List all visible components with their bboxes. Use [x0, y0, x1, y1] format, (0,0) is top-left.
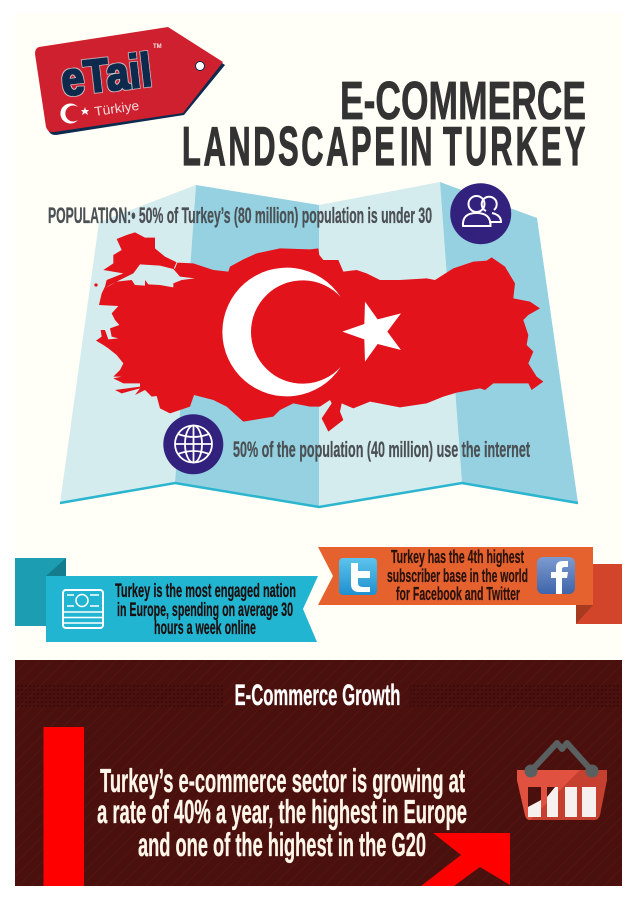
line 3: for Facebook and Twitter	[396, 584, 520, 604]
orange ribbon	[318, 547, 622, 624]
icon: globe	[163, 414, 223, 474]
growth statement	[97, 762, 467, 863]
logo: eTail Türkiye tag	[35, 27, 225, 135]
small island	[94, 283, 98, 287]
blue ribbon	[15, 558, 318, 642]
icon disc	[450, 183, 511, 244]
map panel 1	[60, 185, 196, 503]
panel heading: E-Commerce Growth	[234, 679, 400, 712]
icon: facebook	[537, 557, 575, 594]
Turkey map with flag	[94, 232, 543, 432]
icon: twitter	[339, 558, 377, 595]
ribbon back	[15, 558, 66, 626]
trademark: TM	[153, 44, 162, 50]
line 2: subscriber base in the world	[387, 566, 528, 586]
crescent	[222, 268, 341, 396]
icon: money stack	[63, 590, 103, 628]
ribbon fold	[46, 558, 66, 576]
front person	[463, 196, 491, 226]
basket body dark	[517, 770, 607, 820]
line 1: Turkey is the most engaged nation	[115, 581, 296, 602]
dotted band left	[15, 683, 225, 707]
logo sub label: Türkiye	[93, 98, 140, 119]
dotted band right	[410, 683, 622, 707]
basket slots	[528, 787, 596, 817]
icon: people	[450, 183, 511, 244]
Bosphorus	[174, 262, 177, 269]
red arrow	[421, 833, 510, 886]
Sea of Marmara	[105, 264, 195, 288]
ribbon text	[115, 581, 296, 639]
icon: shopping basket	[517, 743, 607, 820]
Turkey silhouette	[96, 232, 543, 432]
back person	[482, 197, 501, 222]
tag shadow	[36, 28, 225, 135]
tag body	[35, 27, 223, 132]
panel: e-commerce growth	[15, 660, 622, 886]
map panel 4	[440, 182, 578, 503]
map bottom edge	[60, 483, 578, 507]
icon disc	[163, 414, 223, 474]
ribbon front	[318, 547, 593, 605]
map panel 3	[319, 182, 462, 507]
line 2: in Europe, spending on average 30	[117, 600, 293, 621]
title word: in: IN	[400, 117, 432, 177]
line 3: hours a week online	[154, 618, 256, 639]
star	[81, 107, 89, 115]
star	[342, 302, 401, 362]
basket body light	[517, 770, 580, 820]
basket handle	[524, 743, 598, 778]
ribbon back	[576, 564, 622, 624]
title word: landscape: LANDSCAPE	[182, 117, 395, 177]
title word: turkey: TURKEY	[443, 117, 585, 177]
title	[182, 71, 586, 177]
map panel 2	[175, 185, 319, 507]
ribbon text	[387, 547, 528, 604]
ribbon fold	[576, 605, 593, 624]
panel background	[15, 660, 622, 886]
red bar	[44, 727, 84, 886]
crescent	[60, 104, 78, 124]
folded map	[60, 182, 578, 507]
globe lines	[175, 426, 212, 462]
logo wordmark: eTail	[58, 43, 155, 106]
tag hole	[196, 62, 204, 70]
line 1: Turkey has the 4th highest	[391, 547, 524, 567]
ribbon front	[46, 576, 318, 642]
